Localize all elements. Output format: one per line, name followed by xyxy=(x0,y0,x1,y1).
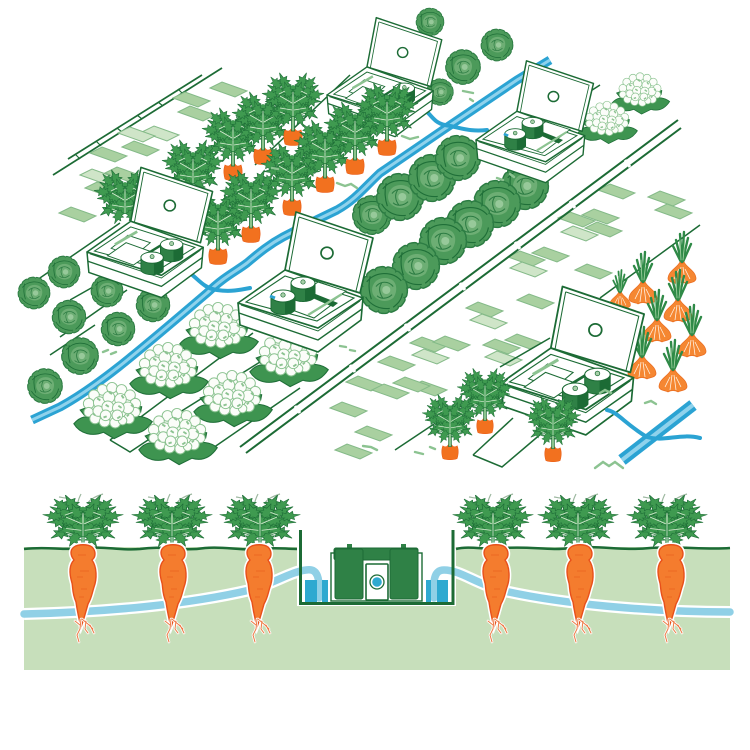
carrot: 1 xyxy=(41,493,125,642)
top-left double path xyxy=(53,68,222,175)
carrot-top plants in front of top box xyxy=(293,80,419,192)
carrot: 2 xyxy=(130,493,214,642)
water pipe: left xyxy=(24,570,319,614)
paving tiles: lower right field xyxy=(330,184,692,459)
lettuce hedge: back row xyxy=(355,139,477,232)
basin water xyxy=(305,580,448,602)
lettuces: upper right xyxy=(418,10,511,103)
crop row lines xyxy=(37,75,700,467)
water box: lower right xyxy=(501,287,644,435)
water tank cross-section xyxy=(331,544,422,601)
water box: left xyxy=(87,167,213,298)
lettuce hedge: front row xyxy=(364,166,545,310)
siphon crossing: upper xyxy=(416,106,487,131)
carrot: 6 xyxy=(625,493,709,642)
ground squiggles xyxy=(103,91,656,468)
carrot-top plants lower right xyxy=(421,366,582,462)
siphon crossing: lower xyxy=(182,270,250,291)
paving tiles: upper left xyxy=(59,82,247,222)
lettuces: lower left xyxy=(20,258,167,401)
water box: top xyxy=(327,18,442,137)
carrot: 3 xyxy=(218,493,302,642)
carrot: 5 xyxy=(536,493,620,642)
ground line left xyxy=(24,548,297,549)
ground line right xyxy=(456,547,730,549)
water box: upper right xyxy=(476,61,593,183)
carrot-top plants behind boxes xyxy=(93,70,325,264)
basin walls xyxy=(300,530,453,604)
short canal lower right xyxy=(607,405,700,460)
main road double line xyxy=(240,120,681,453)
onions xyxy=(610,232,706,392)
main irrigation canal xyxy=(32,60,550,420)
water pipe: right xyxy=(434,570,730,612)
soil cross-section xyxy=(24,547,730,670)
carrot: 4 xyxy=(451,493,535,642)
cauliflowers xyxy=(74,73,670,465)
water box: centre xyxy=(238,212,373,352)
